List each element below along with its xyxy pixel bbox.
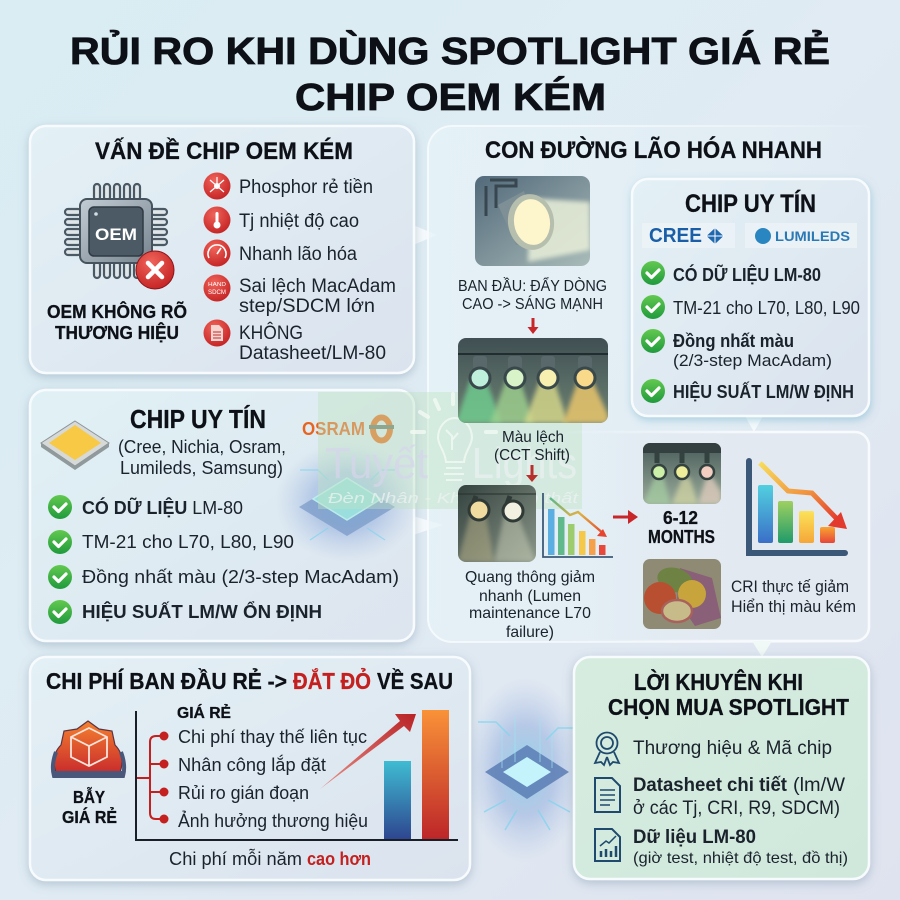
chart: lumen decline small bbox=[543, 493, 613, 557]
arrow: rising cost bbox=[320, 714, 416, 789]
heading: VỀ SAU bbox=[377, 667, 453, 694]
item: MacAdam deviation bbox=[204, 274, 396, 317]
image: faded spotlights bbox=[643, 443, 721, 504]
watermark: Đèn Nhân - Không gian thất bbox=[328, 490, 579, 507]
text: CRI drop bbox=[731, 578, 856, 616]
caption: unknown OEM brand: THƯƠNG HIỆU bbox=[55, 322, 179, 343]
heading: CHỌN MUA SPOTLIGHT bbox=[608, 694, 849, 720]
bar: later cost bbox=[422, 710, 449, 839]
step text: initial: CAO -> SÁNG MẠNH bbox=[462, 294, 603, 313]
heading: CHIP UY TÍN bbox=[685, 189, 816, 218]
caption: cost per year: Chi phí mỗi năm bbox=[169, 848, 302, 869]
heading bbox=[608, 668, 849, 720]
check item: LM-80 bbox=[48, 495, 243, 519]
panel: results after 6-12 months bbox=[642, 430, 870, 642]
arrow: to 6-12 months bbox=[613, 510, 638, 524]
panel: aging pathway backdrop bbox=[428, 126, 886, 642]
label: 6-12 months bbox=[648, 508, 715, 547]
watermark bbox=[318, 392, 582, 509]
panel: advice bbox=[574, 657, 869, 879]
heading: VẤN ĐỀ CHIP OEM KÉM bbox=[95, 137, 353, 165]
label: 6-12 months: MONTHS bbox=[648, 527, 715, 547]
heading: LỜI KHUYÊN KHI bbox=[634, 668, 803, 695]
step text: lumen drop: Quang thông giảm bbox=[465, 569, 595, 586]
item: high Tj bbox=[204, 206, 359, 234]
caption: price trap bbox=[62, 786, 117, 827]
title: RỦI RO KHI DÙNG SPOTLIGHT GIÁ RẺ bbox=[70, 29, 830, 73]
caption: cost per year bbox=[169, 848, 371, 869]
step text: colour shift: Màu lệch bbox=[502, 429, 564, 446]
panel: reputable chip left bbox=[30, 390, 419, 641]
step text: initial bbox=[458, 276, 607, 313]
check item: efficacy: HIỆU SUẤT LM/W ĐỊNH bbox=[673, 381, 854, 402]
check item: colour uniformity: (2/3-step MacAdam) bbox=[673, 351, 832, 370]
check item: efficacy bbox=[641, 379, 854, 403]
item: no datasheet: Datasheet/LM-80 bbox=[239, 343, 386, 364]
icon: LED chip bbox=[41, 421, 109, 470]
arrow: oem panel to pathway bbox=[413, 225, 437, 245]
step text: lumen drop bbox=[465, 569, 595, 641]
heading and brands: CHIP UY TÍN bbox=[130, 404, 266, 434]
chart axes bbox=[136, 711, 458, 840]
step text: lumen drop: maintenance L70 bbox=[469, 605, 591, 622]
title bbox=[70, 29, 830, 119]
logo: Cree: CREE bbox=[649, 225, 702, 247]
heading: ĐẮT ĐỎ bbox=[293, 666, 371, 694]
logo: Osram: OSRAM bbox=[302, 419, 365, 439]
item: cheap phosphor: Phosphor rẻ tiền bbox=[239, 177, 373, 198]
step text: lumen drop: failure) bbox=[506, 624, 554, 641]
cost list: Rủi ro gián đoạn bbox=[178, 783, 309, 803]
title: CHIP OEM KÉM bbox=[295, 75, 606, 119]
aging pathway content bbox=[456, 136, 822, 641]
arrow: result to advice bbox=[752, 641, 772, 657]
heading and brands bbox=[118, 404, 286, 478]
item: high Tj: Tj nhiệt độ cao bbox=[239, 211, 359, 232]
advice: datasheet: (lm/W bbox=[793, 775, 845, 796]
cost list: Chi phí thay thế liên tục bbox=[178, 727, 367, 747]
step text: colour shift bbox=[494, 429, 570, 464]
image: color shifted spotlights bbox=[456, 338, 608, 423]
chart: large decline bbox=[749, 461, 847, 553]
image: fruit with poor colour bbox=[643, 559, 721, 629]
advice: datasheet: ở các Tj, CRI, R9, SDCM) bbox=[633, 798, 840, 819]
check item: TM-21: TM-21 cho L70, L80, L90 bbox=[82, 532, 294, 552]
arrow: reputable chip to result bbox=[745, 416, 763, 432]
logo: Lumileds bbox=[745, 223, 857, 248]
item: MacAdam deviation: Sai lệch MacAdam bbox=[239, 276, 396, 297]
logo: Osram bbox=[302, 418, 394, 440]
caption: cost per year: cao hơn bbox=[307, 849, 371, 869]
icon: OEM chip with X bbox=[65, 184, 174, 289]
advice: LM-80 data bbox=[595, 827, 848, 867]
panel: cost bbox=[30, 657, 470, 880]
logo: Lumileds: LUMILEDS bbox=[775, 228, 850, 244]
item: no datasheet bbox=[204, 320, 386, 364]
advice: brand bbox=[595, 732, 832, 765]
item: no datasheet: KHÔNG bbox=[239, 322, 303, 344]
check item: colour uniformity: Đồng nhất màu (2/3-step MacAdam) bbox=[82, 567, 399, 587]
heading bbox=[46, 666, 453, 694]
item: MacAdam deviation: HAND bbox=[208, 282, 226, 288]
caption: unknown OEM brand bbox=[47, 301, 187, 343]
logo: Cree bbox=[642, 223, 735, 248]
icon: price trap bbox=[53, 721, 124, 776]
label: cheap price: GIÁ RẺ bbox=[177, 703, 231, 722]
caption: price trap: GIÁ RẺ bbox=[62, 806, 117, 827]
circuit glow: bottom bbox=[465, 678, 585, 862]
advice: datasheet: Datasheet chi tiết bbox=[633, 775, 788, 796]
text: CRI drop: Hiển thị màu kém bbox=[731, 598, 856, 616]
check item: LM-80: CÓ DỮ LIỆU LM-80 bbox=[673, 264, 821, 285]
heading: CHI PHÍ BAN ĐẦU RẺ -> bbox=[46, 666, 287, 694]
check item: TM-21 bbox=[48, 530, 294, 554]
caption: price trap: BẪY bbox=[73, 786, 105, 807]
cost list: Ảnh hưởng thương hiệu bbox=[178, 810, 368, 831]
item: cheap phosphor bbox=[204, 172, 373, 200]
bar: initial cost bbox=[384, 761, 411, 839]
arrow: reputable panel to pathway bbox=[413, 516, 443, 535]
tree connectors bbox=[137, 732, 168, 824]
item: fast aging: Nhanh lão hóa bbox=[239, 244, 357, 265]
check item: colour uniformity bbox=[48, 565, 399, 589]
caption: unknown OEM brand: OEM KHÔNG RÕ bbox=[47, 301, 187, 322]
text: CRI drop: CRI thực tế giảm bbox=[731, 578, 849, 596]
advice: LM-80 data: Dữ liệu LM-80 bbox=[633, 827, 756, 848]
check item: LM-80: CÓ DỮ LIỆU LM-80 bbox=[82, 497, 243, 518]
cost list bbox=[178, 727, 368, 831]
item: fast aging bbox=[204, 240, 357, 266]
arrow: down 1 bbox=[528, 318, 538, 334]
item: MacAdam deviation: step/SDCM lớn bbox=[239, 296, 375, 317]
advice: brand: Thương hiệu & Mã chip bbox=[633, 738, 832, 759]
item: MacAdam deviation: SDCM bbox=[208, 290, 226, 296]
icon: OEM chip with X: OEM bbox=[95, 225, 137, 244]
heading and brands: (Cree, Nichia, Osram, bbox=[118, 437, 286, 457]
circuit overlay bbox=[275, 442, 419, 562]
watermark: Lights bbox=[472, 439, 577, 488]
check item: colour uniformity bbox=[641, 329, 832, 370]
step text: initial: BAN ĐẦU: ĐẨY DÒNG bbox=[458, 276, 607, 295]
advice: LM-80 data: (giờ test, nhiệt độ test, đồ thị) bbox=[633, 850, 848, 867]
arrow: down 2 bbox=[526, 465, 538, 482]
image: bright spotlight bbox=[475, 176, 590, 266]
label: 6-12 months: 6-12 bbox=[663, 508, 698, 528]
step text: colour shift: (CCT Shift) bbox=[494, 447, 570, 464]
panel: reputable chip right bbox=[632, 179, 869, 416]
heading and brands: Lumileds, Samsung) bbox=[120, 458, 283, 478]
step text: lumen drop: nhanh (Lumen bbox=[479, 588, 581, 605]
check item: efficacy: HIỆU SUẤT LM/W ỔN ĐỊNH bbox=[82, 601, 322, 622]
watermark: Tuyết bbox=[325, 439, 428, 488]
check item: colour uniformity: Đồng nhất màu bbox=[673, 331, 794, 351]
advice: datasheet bbox=[595, 775, 845, 819]
check item: TM-21: TM-21 cho L70, L80, L90 bbox=[673, 298, 860, 318]
check item: LM-80 bbox=[641, 261, 821, 285]
image: dimmed spotlights bbox=[458, 485, 536, 562]
panel: OEM chip problems bbox=[30, 126, 414, 373]
cost list: Nhân công lắp đặt bbox=[178, 754, 326, 775]
check item: TM-21 bbox=[641, 295, 860, 319]
heading: aging pathway: CON ĐƯỜNG LÃO HÓA NHANH bbox=[485, 136, 822, 164]
